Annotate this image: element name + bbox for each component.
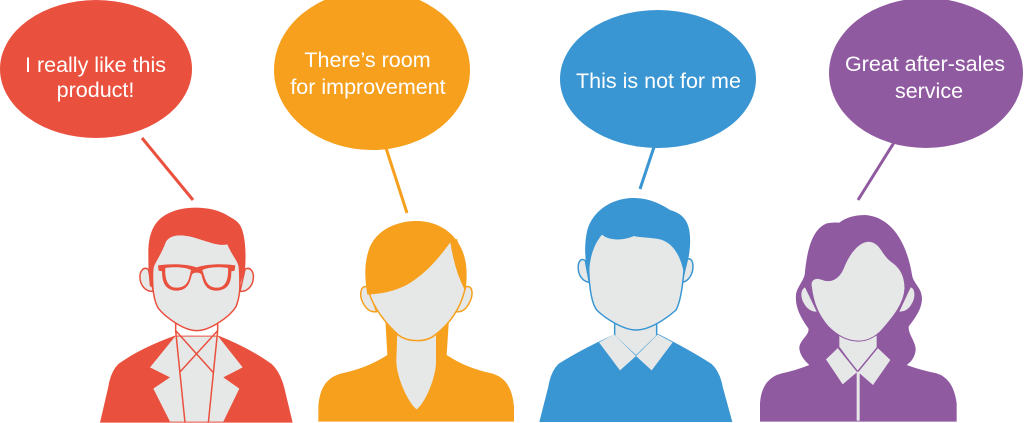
speech bubble: I really like this product: product! xyxy=(57,78,134,102)
speech bubble: There's room for improvement: There’s room xyxy=(304,48,431,72)
speech bubble: I really like this product: I really like this xyxy=(25,53,166,77)
speech bubble: Great after-sales service: Great after-sales xyxy=(845,52,1005,76)
speech bubble: Great after-sales service xyxy=(829,0,1023,200)
speech bubble: There's room for improvement: for improvement xyxy=(290,75,446,99)
speech bubble: Great after-sales service: service xyxy=(895,79,963,103)
speech bubble: I really like this product xyxy=(0,0,193,200)
speech bubble: This is not for me xyxy=(560,10,756,189)
speech bubble: There's room for improvement xyxy=(274,0,470,213)
person: man with glasses, red xyxy=(100,208,293,423)
person: woman with side-swept hair, orange xyxy=(318,221,514,422)
person: woman with wavy hair, purple xyxy=(760,215,957,422)
speech bubble: This is not for me: This is not for me xyxy=(576,69,741,93)
person: man with collar, blue xyxy=(539,198,732,422)
